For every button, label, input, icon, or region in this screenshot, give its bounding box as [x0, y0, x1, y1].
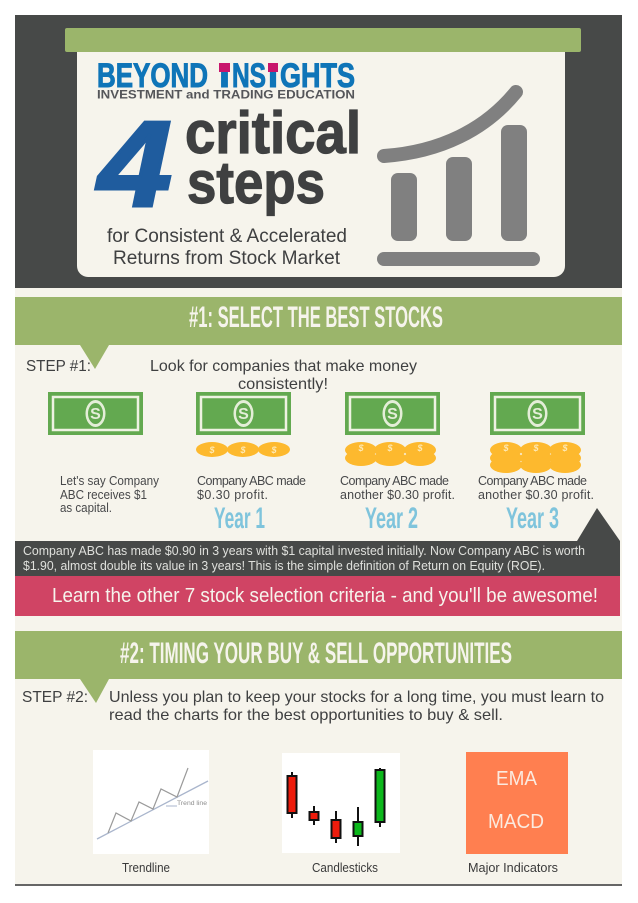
- text: step 1 intro: Look for companies that make money: [150, 358, 417, 375]
- panel: title header: [15, 15, 622, 288]
- icon: coin stacks: $: [208, 445, 215, 455]
- banner: learn more: Learn the other 7 stock selection criteria - and you'll be awesome!: [52, 585, 598, 607]
- text: column captions: [60, 474, 594, 515]
- big number 4: 4: [95, 96, 172, 232]
- text: step 1 intro: [26, 358, 417, 393]
- text: step 1 intro: STEP #1:: [26, 358, 91, 375]
- icon: dollar bills: S: [532, 406, 543, 423]
- icon: coin stacks: $: [532, 443, 539, 453]
- text: column captions: another $0.30 profit.: [340, 488, 455, 502]
- text: step 2 intro: STEP #2:: [22, 689, 88, 706]
- logo: BEYOND: [97, 57, 208, 95]
- text: chart captions: Major Indicators: [468, 861, 558, 875]
- icon: coin stacks: [196, 442, 581, 473]
- text: chart captions: Candlesticks: [312, 861, 378, 875]
- labels: years: Year 1: [214, 502, 265, 535]
- logo: I: [268, 57, 278, 95]
- icon: coin stacks: $: [386, 443, 393, 453]
- icon: coin stacks: $: [270, 445, 277, 455]
- banner: learn more: [15, 576, 620, 616]
- text: column captions: Company ABC made: [478, 474, 587, 488]
- text: step 1 intro: consistently!: [238, 376, 328, 393]
- callout: ROE explanation: $1.90, almost double its value in 3 years! This is the simple definition of Return on Equity (ROE).: [23, 558, 545, 573]
- logo: [97, 57, 355, 102]
- text: column captions: ABC receives $1: [60, 488, 147, 502]
- text: column captions: $0.30 profit.: [197, 488, 268, 502]
- panel: indicators: EMA: [496, 768, 538, 790]
- panel: indicators: [466, 752, 568, 854]
- title: critical steps: [185, 100, 361, 216]
- subtitle: Returns from Stock Market: [113, 248, 341, 269]
- icon: dollar bills: S: [90, 406, 101, 423]
- icon: coin stacks: $: [239, 445, 246, 455]
- text: column captions: Company ABC made: [197, 474, 306, 488]
- logo: I: [219, 57, 230, 95]
- title: critical steps: steps: [187, 150, 325, 216]
- text: step 2 intro: read the charts for the best opportunities to buy & sell.: [109, 707, 503, 724]
- text: step 2 intro: Unless you plan to keep your stocks for a long time, you must learn to: [109, 689, 604, 706]
- title: critical steps: critical: [185, 100, 361, 166]
- text: column captions: another $0.30 profit.: [478, 488, 594, 502]
- text: column captions: Company ABC made: [340, 474, 449, 488]
- subtitle: for Consistent & Accelerated: [107, 226, 347, 247]
- panel: indicators: MACD: [488, 811, 544, 833]
- text: chart captions: Trendline: [122, 861, 170, 875]
- cream card: [77, 52, 565, 277]
- icon: dollar bills: S: [387, 406, 398, 423]
- icon: coin stacks: $: [416, 443, 423, 453]
- chart: candlesticks: [282, 753, 400, 853]
- chart: trendline: [93, 750, 209, 854]
- logo: NS: [232, 57, 266, 95]
- heading: section 1: [15, 297, 622, 369]
- page background: [15, 288, 622, 885]
- callout: ROE explanation: Company ABC has made $0.90 in 3 years with $1 capital invested initially. Now Company ABC is worth: [23, 543, 585, 558]
- icon: coin stacks: $: [357, 443, 364, 453]
- text: column captions: as capital.: [60, 501, 112, 515]
- icon: coin stacks: $: [502, 443, 509, 453]
- green lid: [65, 28, 581, 52]
- labels: years: Year 2: [365, 502, 418, 535]
- callout: ROE explanation: [15, 508, 620, 576]
- logo: INVESTMENT and TRADING EDUCATION: [97, 90, 355, 102]
- icon: dollar bills: S: [238, 406, 249, 423]
- text: step 2 intro: [22, 689, 604, 724]
- labels: years: [214, 502, 559, 535]
- heading: section 2: [15, 631, 622, 703]
- heading: section 1: #1: SELECT THE BEST STOCKS: [189, 301, 443, 334]
- icon: rising bar chart: [377, 92, 540, 266]
- logo: GHTS: [280, 57, 355, 95]
- subtitle: [107, 226, 347, 269]
- text: chart captions: [122, 861, 558, 875]
- chart: trendline: Trend line: [177, 800, 207, 807]
- icon: coin stacks: $: [561, 443, 568, 453]
- text: column captions: Let's say Company: [60, 474, 160, 488]
- icon: dollar bills: [48, 392, 585, 435]
- labels: years: Year 3: [506, 502, 559, 535]
